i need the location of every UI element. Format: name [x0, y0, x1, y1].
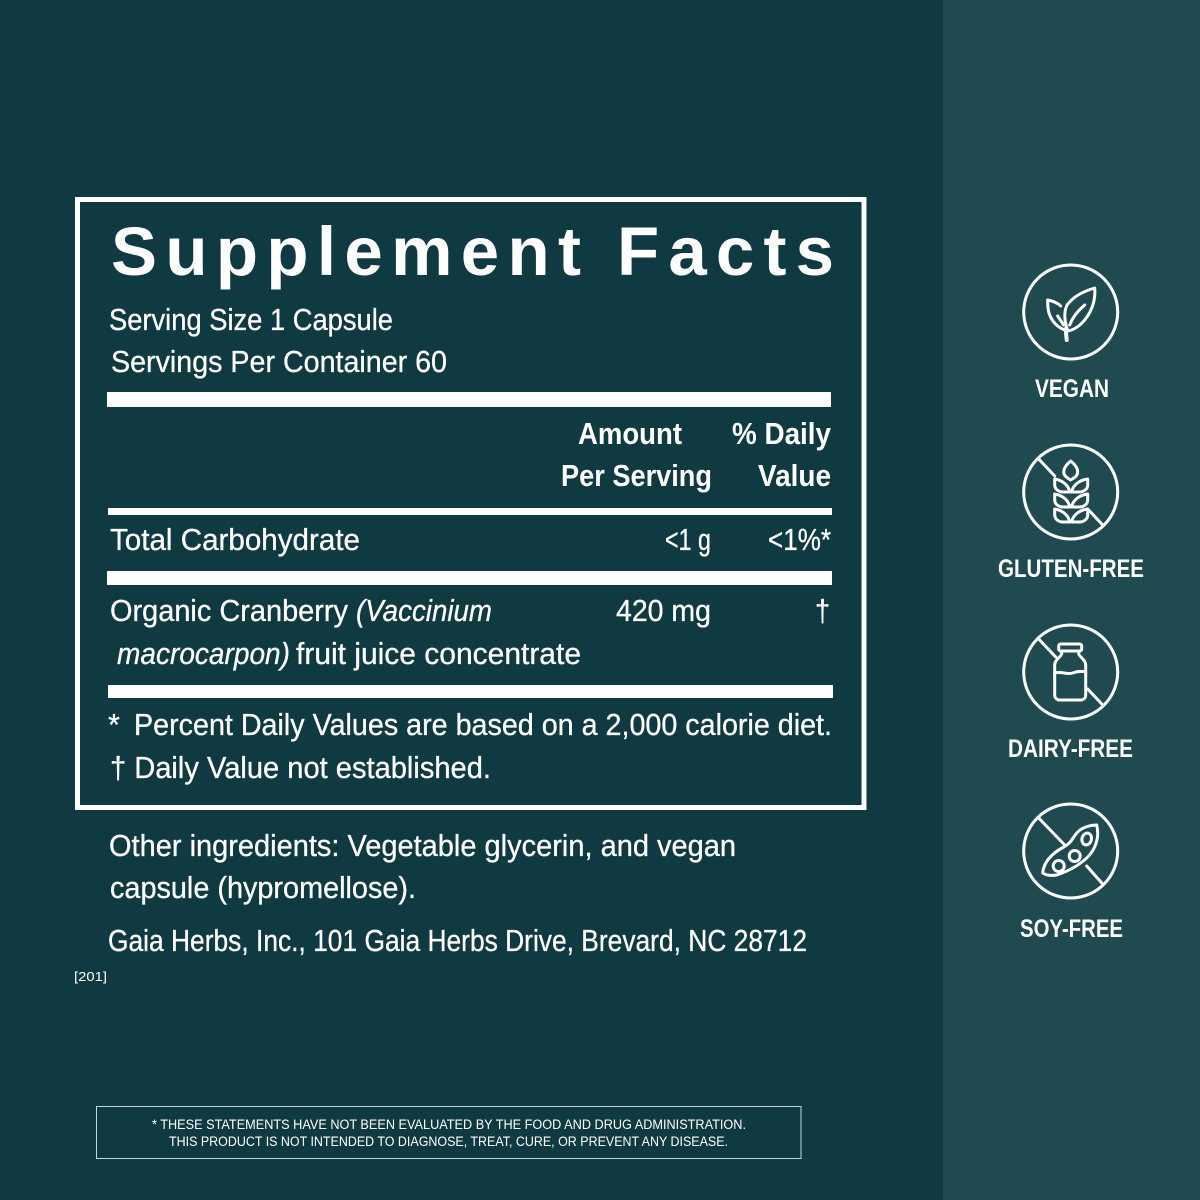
label: soy-free: SOY-FREE [1020, 915, 1123, 943]
row: total carbohydrate: Total Carbohydrate [110, 523, 360, 557]
column header: percent daily value [732, 417, 831, 493]
panel: right sidebar background [943, 0, 1200, 1200]
footnotes: * [108, 708, 120, 742]
icon: soy-free pod [1024, 804, 1118, 898]
icon: vegan leaf [1024, 265, 1118, 359]
other ingredients text: Other ingredients: Vegetable glycerin, and vegan [109, 829, 736, 863]
label: vegan: VEGAN [1035, 375, 1109, 403]
footnotes: Percent Daily Values are based on a 2,000 calorie diet. [134, 708, 832, 742]
title: Supplement [111, 213, 581, 290]
other ingredients text: capsule (hypromellose). [110, 871, 416, 905]
icon: dairy-free milk bottle [1024, 625, 1118, 719]
row: organic cranberry [110, 594, 830, 671]
serving information: Serving Size 1 Capsule [109, 303, 393, 337]
row: organic cranberry: 420 mg [616, 594, 711, 628]
manufacturer address: Gaia Herbs, Inc., 101 Gaia Herbs Drive, Brevard, NC 28712 [108, 924, 807, 958]
label: dairy-free: DAIRY-FREE [1008, 735, 1133, 763]
footnotes: † Daily Value not established. [110, 751, 491, 785]
column header: amount per serving [561, 417, 712, 493]
title: Facts [617, 213, 834, 290]
other ingredients text [109, 829, 736, 905]
row: total carbohydrate [110, 523, 831, 557]
FDA disclaimer box: * THESE STATEMENTS HAVE NOT BEEN EVALUATED BY THE FOOD AND DRUG ADMINISTRATION. [152, 1117, 746, 1132]
column header: amount per serving: Per Serving [561, 459, 712, 493]
column header: percent daily value: % Daily [732, 417, 831, 451]
panel: supplement facts box [78, 200, 864, 808]
row: organic cranberry: † [815, 594, 830, 628]
column header: amount per serving: Amount [578, 417, 682, 451]
row: organic cranberry: macrocarpon) [117, 637, 290, 671]
icon: gluten-free wheat [1024, 445, 1118, 539]
column header: percent daily value: Value [758, 459, 831, 493]
row: organic cranberry: Organic Cranberry [110, 594, 349, 628]
row: organic cranberry: (Vaccinium [356, 594, 492, 628]
label: gluten-free: GLUTEN-FREE [998, 555, 1144, 583]
serving information: Servings Per Container 60 [111, 345, 447, 379]
serving information [109, 303, 447, 379]
row: organic cranberry: fruit juice concentrate [296, 637, 581, 671]
row: total carbohydrate: <1%* [768, 523, 831, 557]
row: total carbohydrate: <1 g [665, 523, 711, 557]
FDA disclaimer box: THIS PRODUCT IS NOT INTENDED TO DIAGNOSE, TREAT, CURE, OR PREVENT ANY DISEASE. [169, 1134, 728, 1149]
FDA disclaimer box [96, 1106, 801, 1158]
lot code: [201] [74, 969, 107, 984]
footnotes [108, 708, 832, 785]
